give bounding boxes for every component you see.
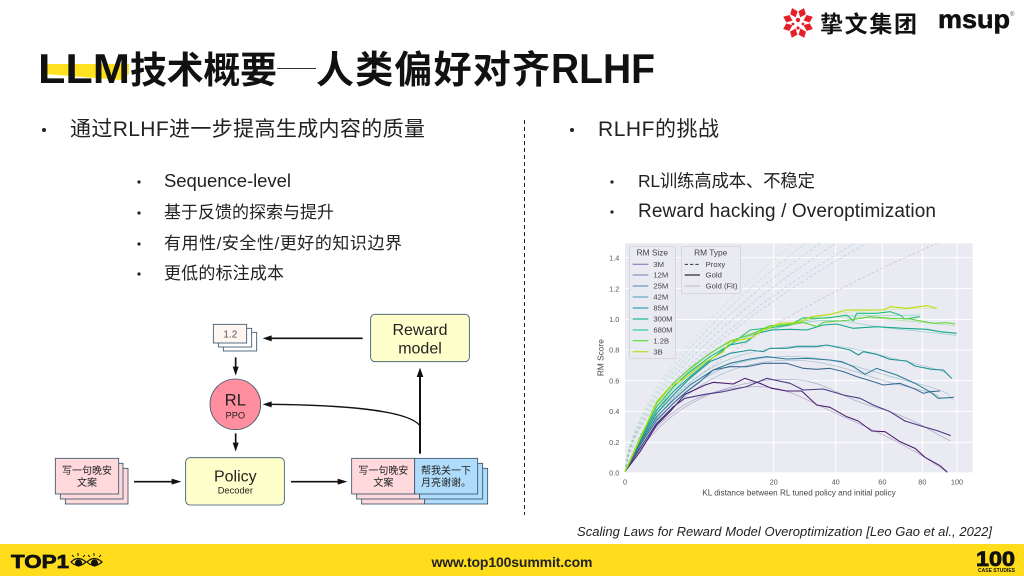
output cards — [352, 458, 488, 504]
output cards: 文案 — [373, 476, 393, 489]
x axis labels: 20 — [770, 478, 778, 487]
policy box — [186, 458, 284, 505]
prompt cards — [55, 458, 128, 504]
RL circle — [210, 379, 261, 430]
legend: RM size: 3M — [653, 260, 664, 269]
arrow: output to RL — [263, 401, 419, 425]
y axis labels: 0.0 — [609, 468, 619, 477]
text block: right sub bullets — [610, 171, 936, 222]
y axis labels: 0.2 — [609, 438, 619, 447]
legend: RM type — [682, 247, 740, 293]
x axis labels: 80 — [918, 478, 926, 487]
text block: left sub bullets: 有用性/安全性/更好的知识边界 — [164, 234, 402, 253]
proxy curves — [625, 243, 938, 470]
panel: reward model: model — [398, 340, 442, 357]
text block: left sub bullets — [137, 170, 402, 283]
output cards: 帮我关一下 — [421, 464, 471, 477]
title: LLM — [38, 45, 130, 92]
footer logo: 100 case studies: 100 — [976, 548, 1015, 571]
RL circle: RL — [225, 391, 246, 410]
title — [38, 45, 655, 92]
y axis labels: 1.4 — [609, 253, 619, 262]
legend: RM size: 300M — [653, 315, 672, 324]
text block: left sub bullets: 更低的标注成本 — [164, 264, 284, 283]
legend: RM type: RM Type — [694, 247, 728, 257]
x axis labels: 0 — [623, 478, 627, 487]
legend: RM size: RM Size — [637, 247, 668, 257]
title: RLHF — [551, 45, 655, 92]
arrow: score to RL — [233, 357, 239, 376]
y axis labels: 0.6 — [609, 376, 619, 385]
x axis labels: 40 — [832, 478, 840, 487]
text block: right sub bullets: Reward hacking / Overoptimization — [638, 201, 936, 222]
policy box: Decoder — [218, 485, 253, 495]
y axis labels — [595, 253, 619, 477]
panel: reward model — [371, 314, 469, 362]
arrow: policy to output — [291, 479, 347, 485]
heading: right bullet: RLHF的挑战 — [598, 118, 719, 141]
gold fit curves — [625, 308, 957, 472]
y axis labels: 1.0 — [609, 315, 619, 324]
policy box: Policy — [214, 469, 257, 486]
text block: left sub bullets: Sequence-level — [164, 170, 291, 191]
footer logo: 100 case studies: CASE STUDIES — [978, 568, 1016, 574]
gold curves — [625, 306, 957, 472]
y axis labels: 1.2 — [609, 284, 619, 293]
y axis labels: RM Score — [595, 339, 605, 376]
legend: RM size: 1.2B — [653, 336, 669, 345]
panel: reward model: Reward — [392, 322, 448, 339]
prompt cards: 写一句晚安 — [62, 464, 112, 477]
heading: left bullet: 通过RLHF进一步提高生成内容的质量 — [70, 118, 425, 141]
diagram: RLHF flow — [55, 314, 488, 505]
legend: RM size: 25M — [653, 282, 668, 291]
logo: msup: msup — [938, 4, 1010, 34]
legend: RM size: 42M — [653, 293, 668, 302]
footer url: www.top100summit.com — [430, 554, 592, 570]
logo: 挚文集团: 挚文集团 — [820, 11, 917, 37]
output cards: 写一句晚安 — [358, 464, 408, 477]
x axis labels — [623, 478, 963, 498]
score cards: 1.2 — [223, 330, 238, 341]
footer logo: TOP1 with eyes — [11, 552, 102, 572]
icon: eyes — [71, 553, 102, 567]
legend: RM size: 680M — [653, 326, 672, 335]
legend: RM size: 85M — [653, 304, 668, 313]
logo: 挚文集团 — [782, 7, 917, 39]
text block: right sub bullets: RL训练高成本、不稳定 — [638, 171, 815, 191]
title: 技术概要 — [130, 50, 277, 91]
logo: msup: ® — [1010, 11, 1015, 18]
title: 人类偏好对齐 — [316, 50, 550, 92]
x axis labels: 100 — [951, 478, 963, 487]
chart: RM score vs KL distance — [598, 243, 972, 497]
divider — [524, 120, 526, 515]
x axis labels: KL distance between RL tuned policy and initial policy — [702, 489, 897, 498]
arrow: prompt to policy — [134, 479, 181, 485]
legend: RM size — [629, 247, 676, 358]
arrow: output to reward — [417, 368, 423, 454]
legend: RM size: 3B — [653, 347, 663, 356]
arrow: reward to score — [263, 335, 363, 341]
legend: RM type: Gold — [706, 271, 722, 280]
y axis labels: 0.4 — [609, 407, 619, 416]
footer band — [0, 544, 1024, 576]
icon: red flower — [782, 7, 814, 39]
arrow: RL to policy — [233, 433, 239, 452]
y axis labels: 0.8 — [609, 346, 619, 355]
output cards: 月亮谢谢。 — [421, 476, 471, 489]
prompt cards: 文案 — [77, 476, 97, 489]
caption: Scaling Laws for Reward Model Overoptimization [Leo Gao et al., 2022] — [577, 524, 992, 539]
RL circle: PPO — [225, 411, 245, 421]
x axis labels: 60 — [878, 478, 886, 487]
legend: RM type: Proxy — [706, 260, 725, 269]
text block: left sub bullets: 基于反馈的探索与提升 — [164, 203, 334, 222]
legend: RM size: 12M — [653, 271, 668, 280]
footer logo: TOP1 with eyes: TOP1 — [11, 552, 69, 572]
legend: RM type: Gold (Fit) — [706, 282, 738, 291]
score cards — [213, 324, 257, 351]
